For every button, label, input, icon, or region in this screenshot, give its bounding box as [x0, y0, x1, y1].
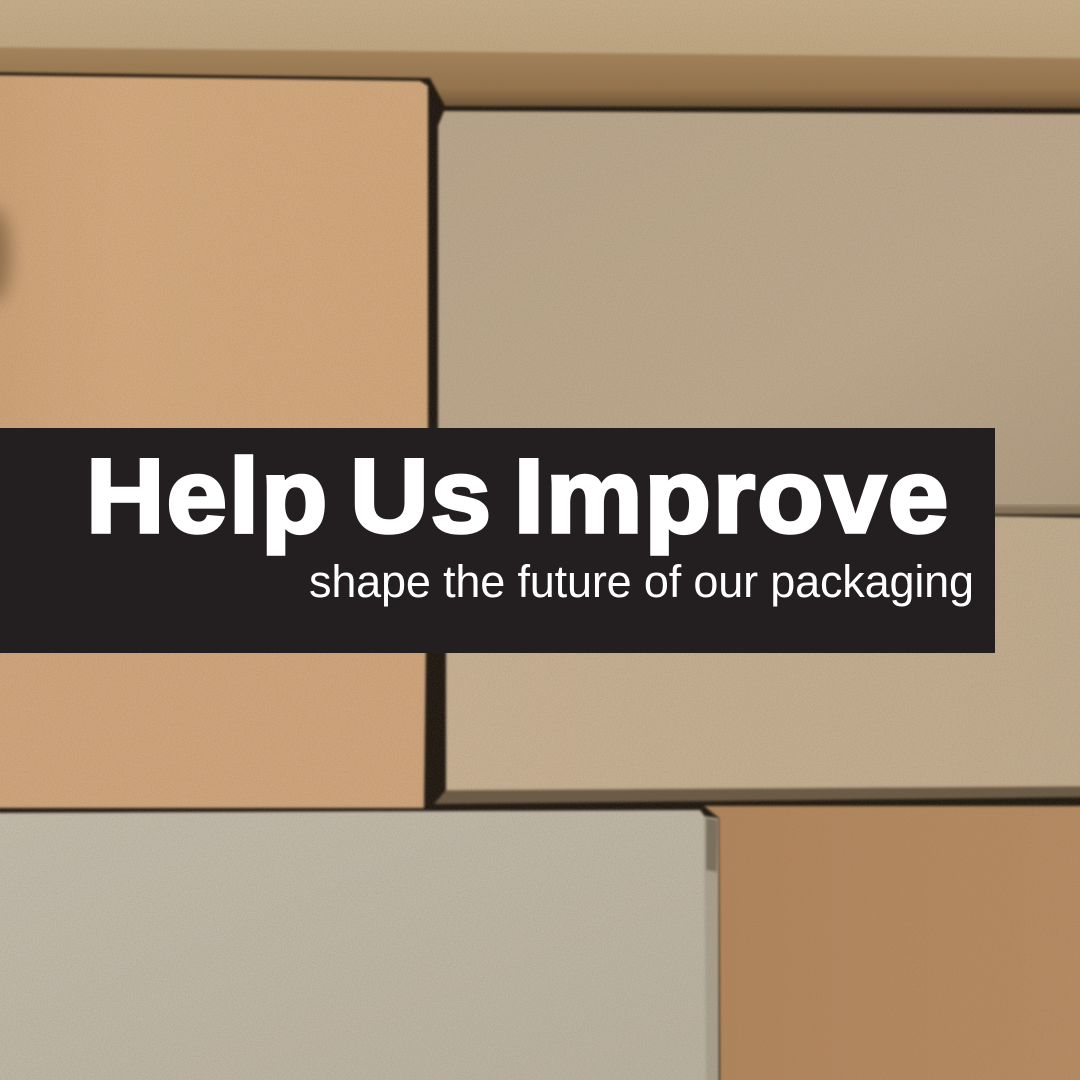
subheading: shape the future of our packaging: [309, 556, 974, 607]
title banner: [0, 428, 995, 653]
upper-right tan box: [438, 111, 1080, 513]
upper-left orange box: [0, 75, 428, 440]
top box: [0, 0, 1080, 108]
middle-right box: [434, 516, 1080, 804]
heading: Help Us Improve: [86, 438, 950, 555]
shadow line between right-hand boxes: [990, 506, 1080, 514]
lower-left gray box: [0, 810, 719, 1080]
lower-right brown box: [704, 806, 1080, 1080]
lower-left orange box: [0, 640, 426, 808]
